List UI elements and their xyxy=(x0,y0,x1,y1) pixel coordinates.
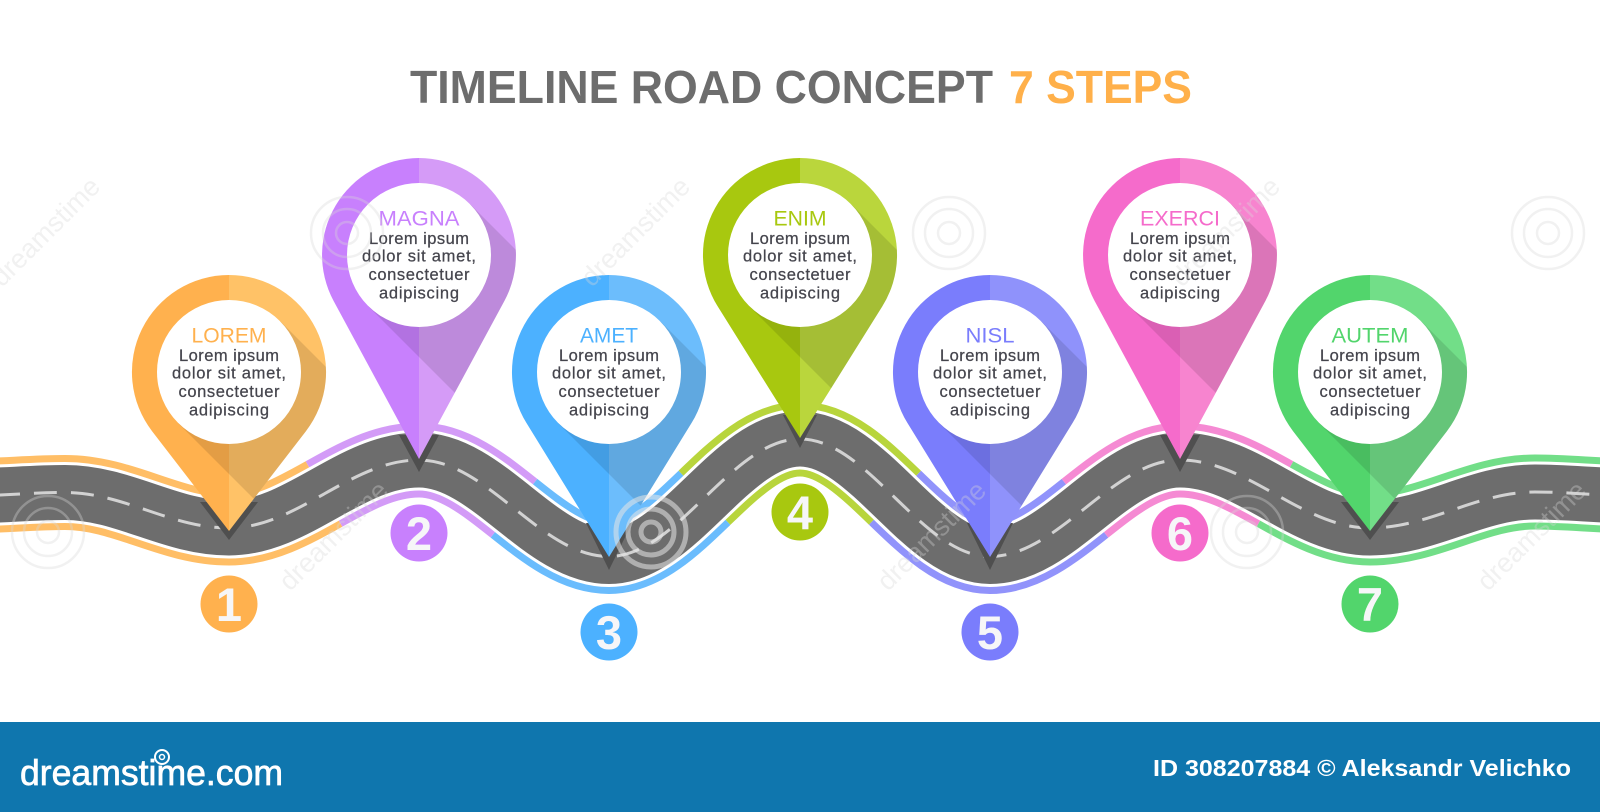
pin 2: MAGNA: Lorem ipsum xyxy=(369,230,469,248)
watermark: dreamstime xyxy=(273,475,394,596)
pin 2: MAGNA xyxy=(322,158,516,459)
road centre dashes xyxy=(0,439,1600,556)
pin 2: MAGNA: MAGNA xyxy=(378,206,460,230)
pin 7: AUTEM: adipiscing xyxy=(1330,401,1410,419)
road edge: orange xyxy=(0,492,324,528)
watermark: dreamstime xyxy=(1471,475,1592,596)
road edge: lime xyxy=(704,439,895,498)
number badge 2: 2 xyxy=(406,507,432,560)
pin 1: LOREM: Lorem ipsum xyxy=(179,347,279,365)
pin 1: LOREM: dolor sit amet, xyxy=(172,365,286,383)
pin 5: NISL: NISL xyxy=(965,323,1015,347)
number badge 2 xyxy=(390,504,448,562)
pin 4: ENIM: ENIM xyxy=(774,206,826,230)
pin 7: AUTEM: dolor sit amet, xyxy=(1313,365,1427,383)
road edge: pink xyxy=(1085,460,1275,508)
pin 1: LOREM: LOREM xyxy=(192,323,266,347)
pin 3: AMET xyxy=(512,275,706,557)
pin 2: MAGNA: dolor sit amet, xyxy=(362,248,476,266)
pin 1: LOREM: consectetuer xyxy=(178,383,280,401)
pin 6: EXERCI: consectetuer xyxy=(1130,266,1231,284)
number badge 1 xyxy=(200,576,258,632)
pin 6: EXERCI: dolor sit amet, xyxy=(1123,248,1237,266)
pin 4: ENIM: adipiscing xyxy=(760,284,840,302)
road edge: green xyxy=(1275,492,1600,528)
number badge 7 xyxy=(1342,576,1398,632)
number badge 3: 3 xyxy=(596,606,622,659)
road edge: blue xyxy=(514,498,704,556)
number badge 4: 4 xyxy=(787,486,813,539)
watermark: dreamstime xyxy=(1165,171,1286,292)
pin 4: ENIM xyxy=(702,158,898,438)
pin 6: EXERCI: Lorem ipsum xyxy=(1130,230,1230,248)
pin 4: ENIM: Lorem ipsum xyxy=(750,230,850,248)
pin 7: AUTEM: Lorem ipsum xyxy=(1320,347,1420,365)
watermark: dreamstime xyxy=(871,475,992,596)
footer bar xyxy=(0,722,1600,812)
pin 5: NISL: Lorem ipsum xyxy=(940,347,1040,365)
pin 1: LOREM xyxy=(132,275,326,531)
road edge: purple xyxy=(324,460,514,508)
pin 3: AMET: AMET xyxy=(580,323,638,347)
pin 2: MAGNA: consectetuer xyxy=(368,266,470,284)
pin 7: AUTEM xyxy=(1272,275,1468,531)
pin 1: LOREM: adipiscing xyxy=(189,401,269,419)
footer logo: dreamstime.com xyxy=(20,752,283,793)
number badge 6 xyxy=(1152,504,1208,562)
pin 5: NISL xyxy=(893,275,1087,557)
road white border xyxy=(0,439,1600,556)
number badge 5: 5 xyxy=(977,606,1003,659)
pin 7: AUTEM: AUTEM xyxy=(1332,323,1408,347)
number badge 1: 1 xyxy=(216,578,242,631)
number badge 3 xyxy=(580,604,638,660)
pin 5: NISL: dolor sit amet, xyxy=(933,365,1047,383)
pin 5: NISL: adipiscing xyxy=(950,401,1030,419)
title: TIMELINE ROAD CONCEPT xyxy=(410,61,993,113)
road asphalt xyxy=(0,439,1600,556)
pin 6: EXERCI xyxy=(1083,158,1277,459)
pin 6: EXERCI: EXERCI xyxy=(1140,206,1220,230)
number badge 5 xyxy=(962,604,1018,660)
road edge: indigo xyxy=(895,498,1085,556)
number badge 7: 7 xyxy=(1357,578,1383,631)
watermark xyxy=(0,171,1592,596)
watermark: dreamstime xyxy=(575,171,696,292)
road xyxy=(0,439,1600,556)
pin 3: AMET: dolor sit amet, xyxy=(552,365,666,383)
pin 5: NISL: consectetuer xyxy=(940,383,1041,401)
pin 3: AMET: consectetuer xyxy=(558,383,660,401)
pin 3: AMET: Lorem ipsum xyxy=(559,347,659,365)
pin 6: EXERCI: adipiscing xyxy=(1140,284,1220,302)
title: 7 STEPS xyxy=(1009,61,1192,113)
pin shadows on road xyxy=(200,415,1399,570)
footer credit: ID 308207884 © Aleksandr Velichko xyxy=(1153,755,1571,781)
pin 3: AMET: adipiscing xyxy=(569,401,649,419)
pin 2: MAGNA: adipiscing xyxy=(379,284,459,302)
number badge 4 xyxy=(772,484,828,540)
pin 7: AUTEM: consectetuer xyxy=(1320,383,1421,401)
pin 4: ENIM: consectetuer xyxy=(750,266,851,284)
number badge 6: 6 xyxy=(1167,507,1193,560)
pin 4: ENIM: dolor sit amet, xyxy=(743,248,857,266)
